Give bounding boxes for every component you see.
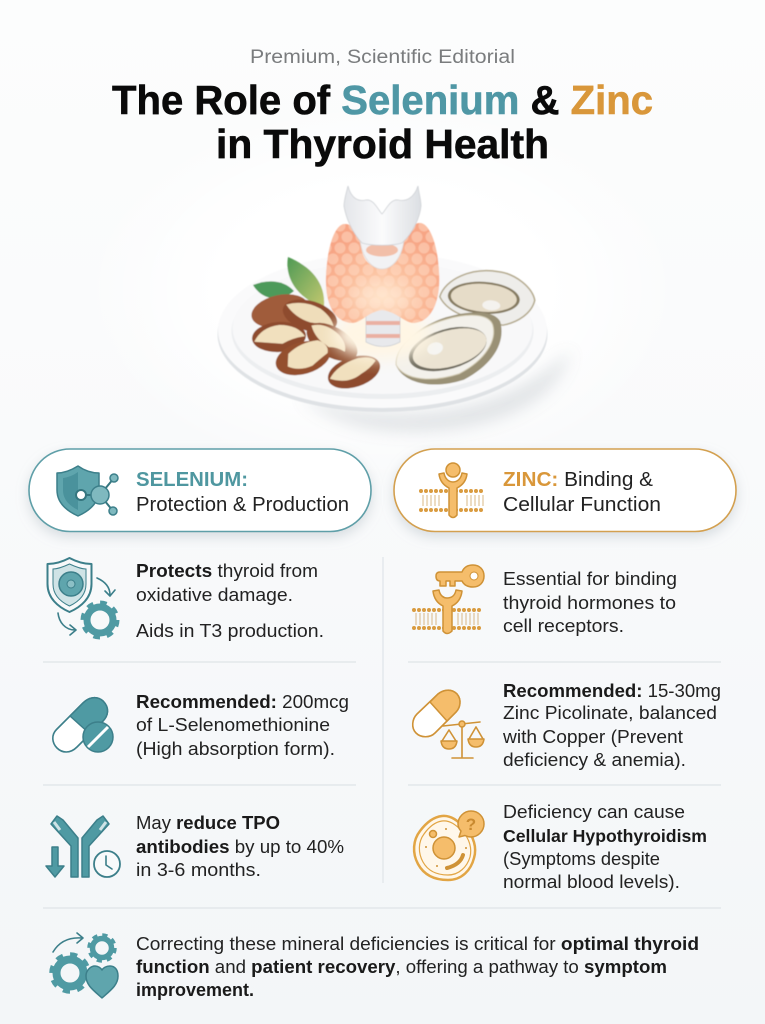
leaves bbox=[253, 257, 324, 307]
thyroid lobes bbox=[326, 223, 439, 323]
text: Deficiency can cause bbox=[503, 802, 685, 822]
trachea bbox=[366, 308, 400, 346]
text: antibodies by up to 40% bbox=[136, 837, 344, 857]
text bbox=[136, 561, 324, 641]
thyroid gland with cartilage and trachea bbox=[326, 186, 439, 359]
panel: selenium header bbox=[29, 449, 371, 532]
icon: membrane receptor bbox=[421, 463, 485, 518]
text: Correcting these mineral deficiencies is critical for optimal thyroid bbox=[136, 934, 699, 954]
conclusion bbox=[52, 933, 699, 1000]
text bbox=[136, 934, 699, 1000]
text: Recommended: 15-30mg bbox=[503, 681, 721, 701]
zinc: binding row bbox=[414, 565, 677, 636]
text: in 3-6 months. bbox=[136, 860, 261, 880]
text bbox=[136, 692, 349, 759]
zinc: dosage row bbox=[413, 681, 721, 770]
icon: shield with molecule bbox=[57, 466, 118, 516]
title: in Thyroid Health bbox=[216, 121, 549, 167]
heading text bbox=[503, 469, 661, 516]
icon: cell with question bubble: ? bbox=[466, 815, 476, 834]
icon: capsule and balance scale bbox=[413, 690, 484, 758]
text: (Symptoms despite bbox=[503, 849, 660, 869]
icon: capsule and tablet bbox=[53, 698, 113, 752]
text: deficiency & anemia). bbox=[503, 750, 686, 770]
panel: zinc header bbox=[394, 449, 736, 532]
selenium: dosage row bbox=[53, 692, 349, 759]
text: with Copper (Prevent bbox=[502, 727, 683, 747]
text: normal blood levels). bbox=[503, 872, 680, 892]
icon: gears and heart bbox=[52, 933, 118, 998]
heading text bbox=[136, 469, 349, 516]
title bbox=[112, 77, 653, 167]
cartilage bbox=[360, 240, 404, 269]
hero illustration: plate with thyroid, Brazil nuts and oysters bbox=[218, 186, 570, 432]
text: improvement. bbox=[136, 980, 254, 1000]
text: thyroid hormones to bbox=[503, 593, 676, 613]
plate bbox=[218, 253, 548, 412]
icon: key and receptor bbox=[414, 565, 484, 634]
heading text: ZINC: Binding & bbox=[503, 469, 654, 491]
text: Aids in T3 production. bbox=[136, 621, 324, 641]
text: (High absorption form). bbox=[136, 739, 335, 759]
selenium: protection row bbox=[48, 558, 324, 641]
heading text: Protection & Production bbox=[136, 494, 349, 516]
icon: cell with question bubble bbox=[414, 811, 484, 880]
oysters bbox=[387, 267, 537, 397]
text: Recommended: 200mcg bbox=[136, 692, 349, 712]
text: Protects thyroid from bbox=[136, 561, 318, 581]
text: oxidative damage. bbox=[136, 585, 293, 605]
text: Cellular Hypothyroidism bbox=[503, 826, 707, 846]
text bbox=[503, 802, 707, 892]
heading text: Cellular Function bbox=[503, 494, 661, 516]
text: cell receptors. bbox=[503, 616, 624, 636]
title: The Role of Selenium & Zinc bbox=[112, 77, 653, 123]
text bbox=[502, 681, 721, 770]
selenium: antibodies row bbox=[46, 813, 344, 880]
Brazil nuts bbox=[248, 289, 384, 395]
heading text: SELENIUM: bbox=[136, 469, 248, 491]
text: May reduce TPO bbox=[136, 813, 280, 833]
text: Essential for binding bbox=[503, 569, 677, 589]
text bbox=[136, 813, 344, 880]
icon: antibody, down arrow and clock bbox=[46, 816, 120, 877]
text bbox=[503, 569, 677, 636]
zinc: deficiency row bbox=[414, 802, 707, 892]
icon: shield cell and gear bbox=[48, 558, 117, 637]
eyebrow: Premium, Scientific Editorial: Premium, Scientific Editorial bbox=[250, 47, 515, 68]
text: of L-Selenomethionine bbox=[136, 715, 330, 735]
text: function and patient recovery , offering a pathway to symptom bbox=[136, 957, 667, 977]
text: Zinc Picolinate, balanced bbox=[503, 703, 717, 723]
